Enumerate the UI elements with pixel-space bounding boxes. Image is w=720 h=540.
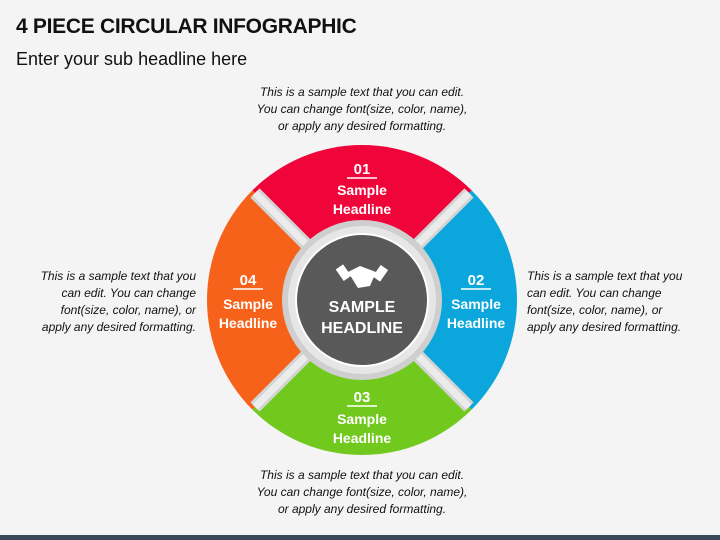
text block right: can edit. You can change xyxy=(527,286,662,300)
segment 03: 03 xyxy=(354,389,370,406)
segment 01: Headline xyxy=(333,201,391,217)
segment 01: Sample xyxy=(337,182,387,198)
text block bottom: You can change font(size, color, name), xyxy=(257,485,467,499)
text block right: font(size, color, name), or xyxy=(527,303,662,317)
text block bottom: or apply any desired formatting. xyxy=(278,502,446,516)
text block left xyxy=(41,269,196,334)
segment 04 xyxy=(207,190,362,410)
segment 04: 04 xyxy=(240,272,257,289)
text block top: This is a sample text that you can edit. xyxy=(260,85,464,99)
text block right xyxy=(527,269,682,334)
text block top xyxy=(257,85,467,133)
center circle xyxy=(282,220,442,380)
segment 02: Headline xyxy=(447,315,505,331)
segment 03: Sample xyxy=(337,411,387,427)
subtitle: Enter your sub headline here xyxy=(16,49,247,69)
segment 03: Headline xyxy=(333,430,391,446)
center circle: HEADLINE xyxy=(321,320,403,337)
text block left: apply any desired formatting. xyxy=(42,320,196,334)
segment 04: Sample xyxy=(223,296,273,312)
text block left: can edit. You can change xyxy=(61,286,196,300)
segment 01 xyxy=(252,145,472,300)
segment 01: 01 xyxy=(354,161,370,178)
segment 04: Headline xyxy=(219,315,277,331)
title: 4 PIECE CIRCULAR INFOGRAPHIC xyxy=(16,15,356,38)
text block left: font(size, color, name), or xyxy=(61,303,196,317)
text block right: This is a sample text that you xyxy=(527,269,682,283)
segment 03 xyxy=(252,300,472,455)
footer bar xyxy=(0,535,720,540)
text block bottom xyxy=(257,468,467,516)
segment 02: 02 xyxy=(468,272,484,289)
text block right: apply any desired formatting. xyxy=(527,320,681,334)
segment 02: Sample xyxy=(451,296,501,312)
segment 02 xyxy=(362,190,517,410)
icon: handshake xyxy=(336,264,388,288)
text block top: or apply any desired formatting. xyxy=(278,119,446,133)
text block left: This is a sample text that you xyxy=(41,269,196,283)
text block bottom: This is a sample text that you can edit. xyxy=(260,468,464,482)
text block top: You can change font(size, color, name), xyxy=(257,102,467,116)
center circle: SAMPLE xyxy=(329,299,396,316)
